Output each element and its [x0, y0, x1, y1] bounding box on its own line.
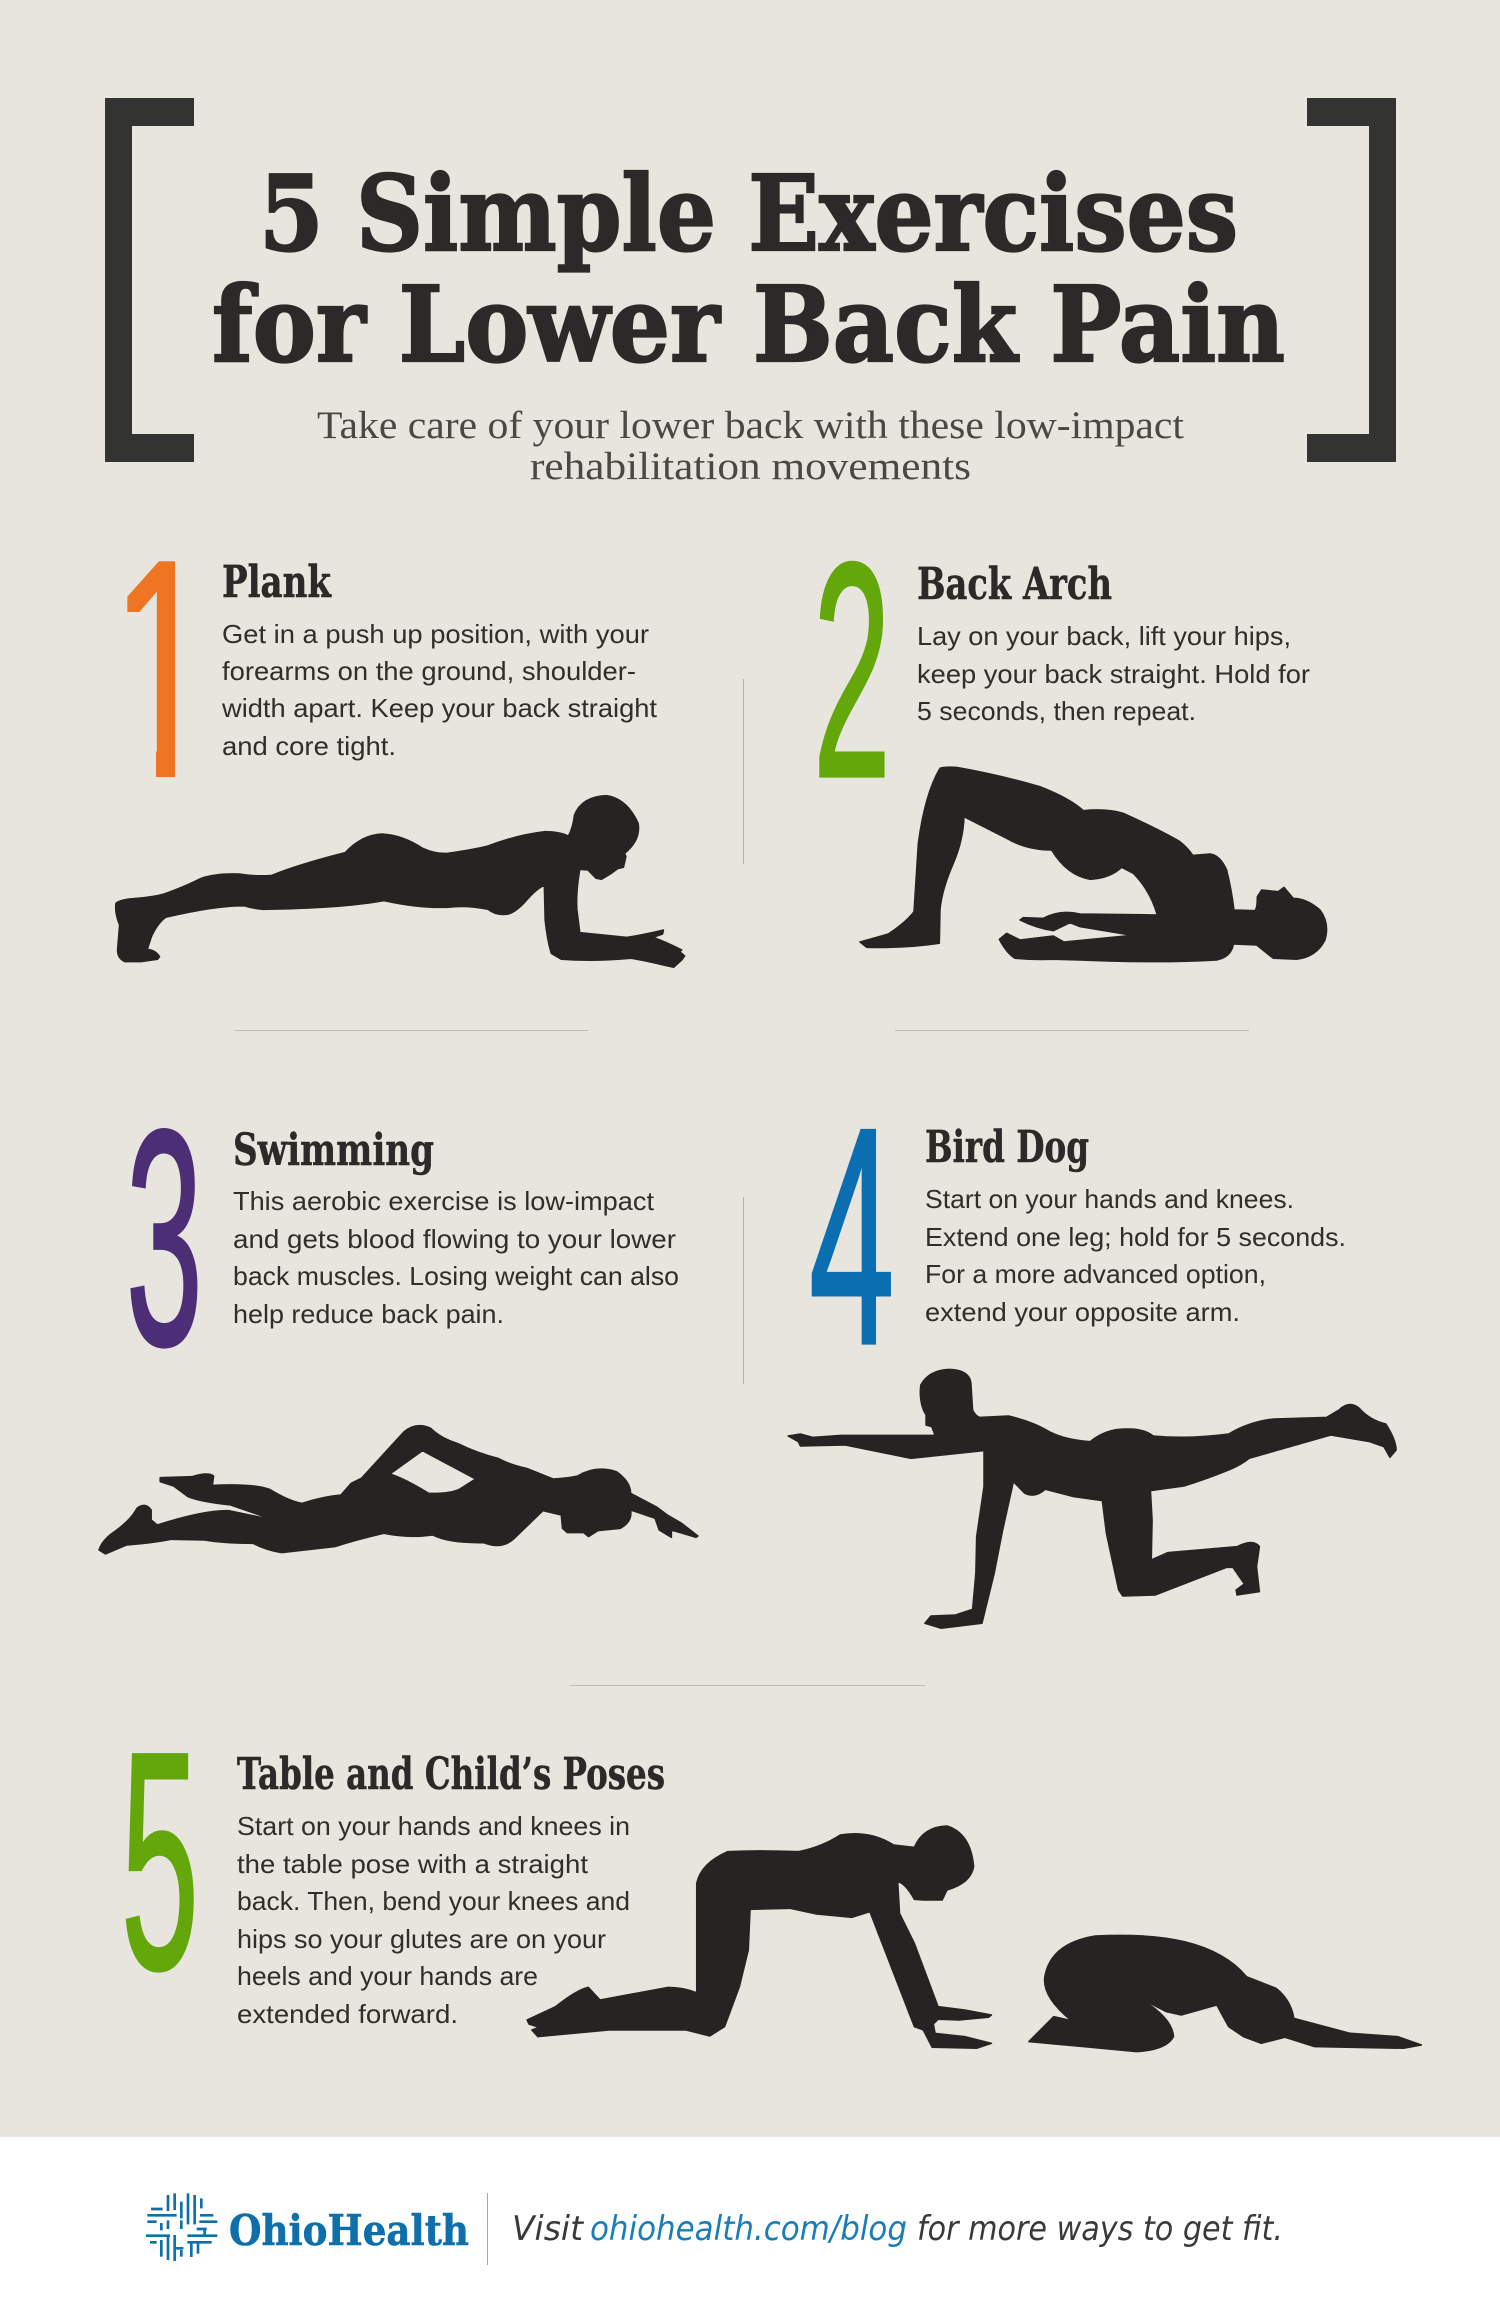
description: table and child's poses — [237, 1811, 630, 2029]
number 3: 3 — [126, 1068, 203, 1410]
number 1: 1 — [110, 496, 216, 842]
description: bird dog: For a more advanced option, — [925, 1259, 1266, 1289]
right bracket — [1307, 98, 1396, 462]
subtitle: Take care of your lower back with these low-impact — [317, 404, 1184, 447]
description: bird dog — [925, 1184, 1346, 1327]
description: table and child's poses: the table pose with a straight — [237, 1849, 589, 1879]
call to action — [512, 2209, 1283, 2249]
title: 5 Simple Exercises — [259, 152, 1238, 275]
description: bird dog: Start on your hands and knees. — [925, 1184, 1294, 1214]
description: back arch: keep your back straight. Hold for — [917, 659, 1310, 689]
title: for Lower Back Pain — [212, 263, 1285, 386]
description: swimming: and gets blood flowing to your lower — [233, 1224, 676, 1254]
description: swimming: back muscles. Losing weight can also — [233, 1261, 679, 1291]
description: plank — [221, 619, 658, 761]
description: back arch — [917, 621, 1310, 726]
description: plank: forearms on the ground, shoulder- — [222, 656, 636, 686]
description: back arch: Lay on your back, lift your hips, — [917, 621, 1291, 651]
panel: back arch — [813, 501, 1327, 962]
panel: bird dog — [788, 1063, 1396, 1628]
description: bird dog: extend your opposite arm. — [925, 1297, 1240, 1327]
description: table and child's poses: hips so your glutes are on your — [237, 1924, 606, 1954]
heading: bird dog: Bird Dog — [925, 1122, 1089, 1173]
description: bird dog: Extend one leg; hold for 5 seconds. — [925, 1222, 1346, 1252]
silhouette: table pose — [527, 1826, 991, 2048]
description: swimming: help reduce back pain. — [233, 1299, 504, 1329]
description: swimming: This aerobic exercise is low-impact — [233, 1186, 655, 1216]
silhouette: swimming — [99, 1426, 698, 1554]
description: table and child's poses: back. Then, bend your knees and — [237, 1886, 630, 1916]
heading: swimming: Swimming — [233, 1125, 434, 1176]
panel: plank — [114, 561, 686, 968]
footer bar — [0, 2137, 1500, 2323]
description: swimming — [233, 1186, 679, 1329]
logotype: OhioHealth — [229, 2206, 469, 2255]
call to action: Visit — [512, 2209, 585, 2249]
subtitle — [317, 404, 1184, 488]
icon: OhioHealth logo — [146, 2193, 217, 2261]
panel: swimming — [99, 1068, 698, 1554]
title — [212, 152, 1285, 386]
description: back arch: 5 seconds, then repeat. — [917, 696, 1196, 726]
silhouette: plank — [116, 796, 685, 967]
left bracket — [105, 98, 194, 462]
silhouette: back arch — [860, 767, 1327, 962]
panel: table and child's poses — [121, 1687, 1421, 2052]
description: plank: Get in a push up position, with your — [222, 619, 649, 649]
heading: table and child's poses: Table and Child’s Poses — [237, 1749, 665, 1800]
heading: plank: Plank — [222, 557, 332, 608]
description: plank: and core tight. — [222, 731, 396, 761]
description: table and child's poses: heels and your hands are — [237, 1961, 538, 1991]
number 2: 2 — [813, 501, 891, 842]
silhouette: bird dog — [788, 1369, 1396, 1628]
subtitle: rehabilitation movements — [530, 445, 971, 488]
silhouette: child's pose — [1029, 1935, 1421, 2052]
number 4: 4 — [809, 1063, 895, 1409]
description: plank: width apart. Keep your back straight — [221, 693, 658, 723]
number 5: 5 — [121, 1687, 199, 2034]
description: table and child's poses: extended forward. — [237, 1999, 458, 2029]
call to action: for more ways to get fit. — [917, 2209, 1283, 2249]
heading: back arch: Back Arch — [917, 559, 1112, 610]
description: table and child's poses: Start on your hands and knees in — [237, 1811, 630, 1841]
call to action: ohiohealth.com/blog — [590, 2209, 907, 2249]
